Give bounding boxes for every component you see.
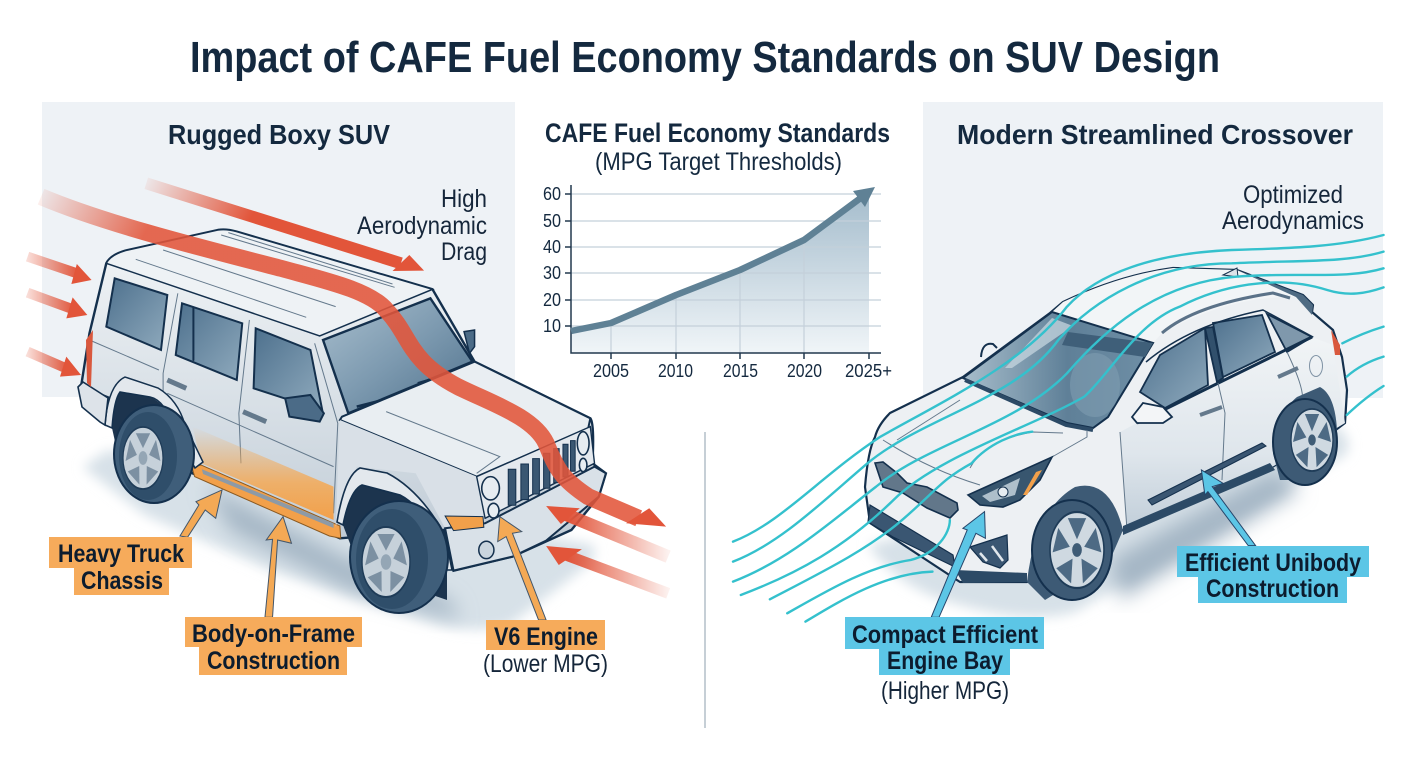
callout: compact efficient engine bay (845, 617, 1044, 705)
callout: compact efficient engine bay: Compact Efficient (852, 621, 1039, 649)
y axis labels: 10 (543, 316, 561, 336)
side sill (192, 465, 341, 538)
side windows (1140, 314, 1312, 408)
title: Impact of CAFE Fuel Economy Standards on SUV Design (190, 33, 1220, 82)
chart: CAFE fuel economy standards (543, 118, 892, 381)
roof (106, 230, 432, 336)
fog lamp (970, 535, 1008, 568)
door seams (1120, 352, 1302, 530)
airflow: front arrows (546, 506, 668, 593)
airflow streamlines (733, 235, 1384, 622)
arrow: body-on-frame (265, 517, 291, 617)
illustration: rugged boxy SUV (28, 183, 668, 629)
lower lip (955, 570, 1027, 583)
headlights (482, 432, 589, 518)
area under curve (571, 192, 869, 353)
x axis labels: 2010 (658, 361, 693, 381)
ground shadow (83, 450, 595, 629)
grille (508, 441, 575, 505)
callout: heavy truck chassis: Chassis (81, 567, 163, 595)
label: high aerodynamic drag: Aerodynamic (357, 212, 487, 240)
airflow: rear arrows (28, 257, 92, 377)
airflow: main drag ribbon (41, 197, 666, 527)
grille (875, 462, 958, 518)
chart heading: CAFE Fuel Economy Standards (545, 118, 890, 148)
illustration: streamlined crossover (733, 235, 1384, 622)
y axis labels: 20 (543, 290, 561, 310)
door handles (1200, 368, 1298, 415)
callout: compact efficient engine bay: (Higher MPG) (881, 677, 1009, 705)
callout: body-on-frame construction: Construction (207, 647, 340, 675)
callout: efficient unibody construction: Efficient Unibody (1185, 549, 1361, 577)
hood (340, 362, 590, 477)
chart subheading: (MPG Target Thresholds) (595, 148, 842, 176)
bumper (445, 467, 606, 571)
arrow: heavy truck chassis (180, 490, 222, 537)
label: high aerodynamic drag (357, 185, 487, 266)
callout: heavy truck chassis (49, 537, 192, 595)
lower intake (868, 505, 955, 567)
callout: body-on-frame construction (185, 617, 362, 675)
far mirror (981, 344, 997, 357)
headlight (968, 457, 1052, 507)
callout: heavy truck chassis: Heavy Truck (58, 540, 184, 568)
callout: V6 engine (483, 620, 608, 678)
arrow: unibody (1201, 470, 1256, 546)
hood lines (883, 400, 1087, 485)
body (865, 268, 1347, 582)
label: optimized aerodynamics: Aerodynamics (1222, 207, 1364, 235)
front wheel arch (337, 468, 452, 600)
front fender (336, 420, 485, 528)
callout: compact efficient engine bay: Engine Bay (887, 647, 1003, 675)
y axis labels: 30 (543, 263, 561, 283)
panel: right background (923, 102, 1383, 398)
x axis labels: 2020 (787, 361, 822, 381)
roof spoiler (1237, 270, 1313, 315)
arrow: V6 engine (498, 517, 546, 620)
x axis labels: 2025+ (845, 361, 892, 381)
heading: rugged boxy SUV: Rugged Boxy SUV (168, 119, 390, 150)
rear wheel arch and bumper (78, 330, 203, 480)
orange underbody highlight (193, 427, 334, 520)
trend arrow (571, 187, 875, 331)
rear wheel (1273, 387, 1337, 485)
front wheel (350, 501, 448, 613)
roof (1052, 268, 1297, 343)
body (81, 230, 606, 571)
mirror (1132, 403, 1172, 423)
y axis labels (543, 184, 561, 336)
door lines (89, 293, 338, 513)
x axis labels: 2005 (593, 361, 629, 381)
windshield (323, 298, 472, 413)
roof rail (1162, 293, 1290, 333)
side panels (1120, 337, 1345, 530)
front fascia (477, 427, 595, 518)
arrow: compact engine bay (931, 512, 985, 617)
taillight (1331, 330, 1340, 355)
heading: modern crossover: Modern Streamlined Crossover (957, 119, 1353, 150)
y axis labels: 50 (543, 211, 561, 231)
x axis labels (593, 361, 892, 381)
divider (704, 432, 706, 728)
panel: left background (42, 102, 515, 397)
label: optimized aerodynamics: Optimized (1243, 181, 1343, 209)
rear windows (106, 278, 167, 350)
y axis labels: 40 (543, 237, 561, 257)
callout: efficient unibody construction (1177, 546, 1369, 603)
windshield (963, 312, 1153, 430)
mirrors (285, 395, 324, 422)
front wheel (1027, 486, 1123, 600)
callout: efficient unibody construction: Construction (1206, 575, 1339, 603)
fuel door (1310, 356, 1322, 376)
shark fin (1223, 268, 1238, 277)
side trim (1148, 443, 1266, 505)
callout: V6 engine: (Lower MPG) (483, 650, 608, 678)
x axis labels: 2015 (723, 361, 758, 381)
y axis labels: 60 (543, 184, 561, 204)
callout: V6 engine: V6 Engine (494, 623, 598, 651)
label: high aerodynamic drag: Drag (441, 238, 487, 266)
callout: body-on-frame construction: Body-on-Frame (192, 620, 355, 648)
ground shadow (868, 425, 1348, 617)
airflow: top arrow (146, 183, 424, 271)
rear wheel (114, 405, 194, 503)
label: optimized aerodynamics (1222, 181, 1364, 235)
label: high aerodynamic drag: High (441, 185, 487, 213)
